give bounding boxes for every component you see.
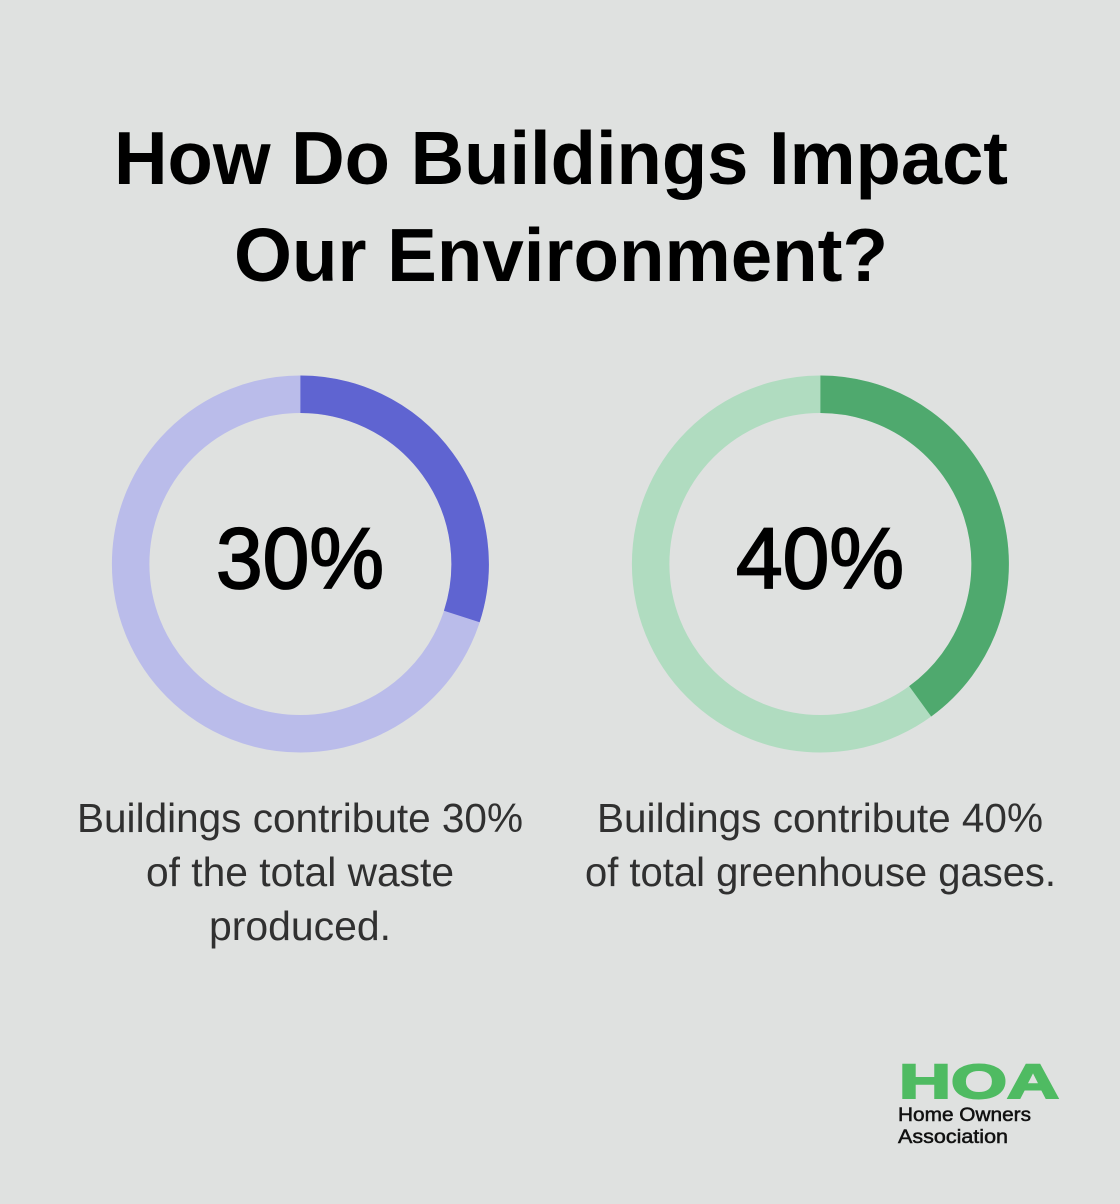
title [114, 116, 1008, 297]
description: waste: Buildings contribute 30% [77, 795, 523, 841]
description: waste: produced. [209, 903, 391, 949]
logo: Home Owners Association: Home Owners [898, 1105, 1031, 1126]
logo: Home Owners Association [898, 1056, 1059, 1148]
title: Our Environment? [234, 213, 888, 297]
logo: Home Owners Association: HOA [899, 1056, 1059, 1109]
value: 40%: 40% [736, 511, 904, 607]
title: How Do Buildings Impact [114, 116, 1008, 200]
value: 30%: 30% [216, 511, 384, 607]
description: greenhouse gases: of total greenhouse gases. [585, 849, 1056, 895]
description: greenhouse gases [585, 795, 1056, 895]
description: waste: of the total waste [146, 849, 454, 895]
donut chart: 30% [131, 394, 470, 734]
logo: Home Owners Association: Association [898, 1127, 1008, 1148]
panel: greenhouse gas statistic [585, 394, 1056, 895]
donut chart: 40% [651, 394, 990, 734]
panel: waste statistic [77, 394, 523, 949]
description: waste [77, 795, 523, 949]
description: greenhouse gases: Buildings contribute 40% [597, 795, 1043, 841]
